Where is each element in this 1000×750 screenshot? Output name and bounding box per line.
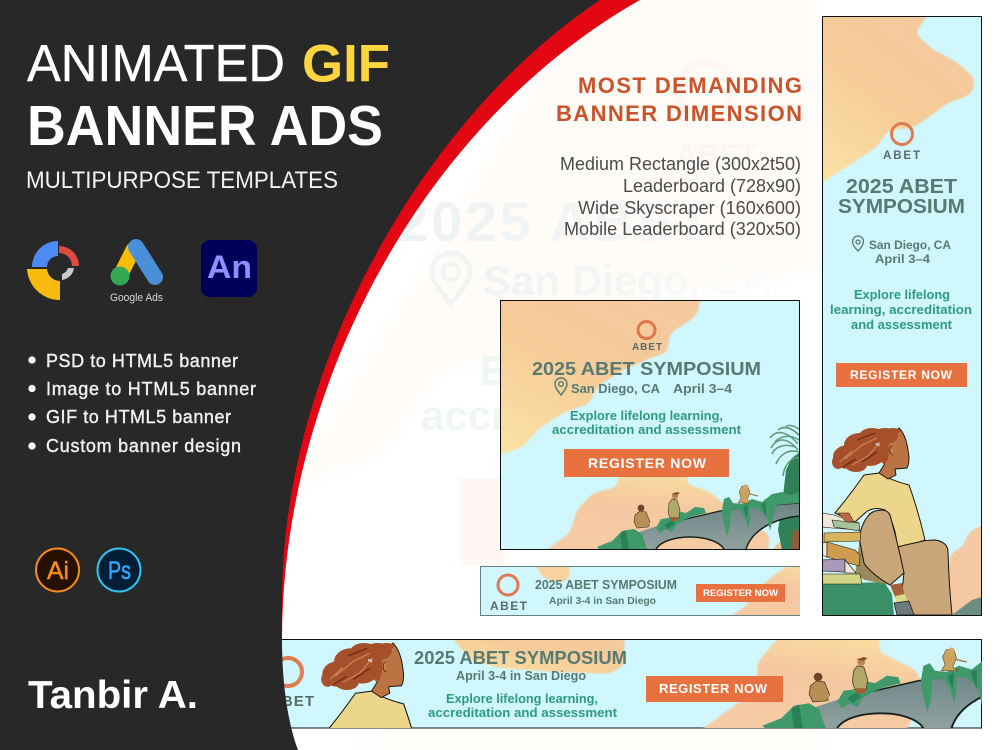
icon: google ads	[110, 247, 163, 304]
faint ghost banner backdrop: accr	[421, 392, 507, 439]
banner tagline: accreditation and assessment	[552, 422, 742, 437]
list: banner services: PSD to HTML5 banner	[46, 351, 238, 371]
icon: google ads: Google Ads	[110, 292, 163, 304]
author name: Tanbir A.	[28, 674, 198, 717]
heading: most demanding banner dimension	[556, 73, 802, 126]
banner tagline: Explore lifelong	[854, 288, 950, 302]
location and date: San Diego, CA	[869, 238, 951, 252]
banner tagline	[428, 691, 618, 720]
button: register now: REGISTER NOW	[588, 455, 707, 471]
date and place: April 3-4 in San Diego	[549, 595, 656, 607]
list: banner services: Custom banner design	[46, 436, 241, 456]
heading: most demanding banner dimension: MOST DEMANDING	[578, 73, 802, 98]
location and date	[571, 381, 733, 396]
banner tagline: accreditation and assessment	[428, 705, 618, 720]
button: register now: REGISTER NOW	[703, 588, 778, 599]
location and date: San Diego, CA	[571, 381, 661, 396]
icon: map pin	[852, 236, 864, 251]
list: banner services	[28, 351, 256, 456]
icon: adobe animate: An	[207, 249, 252, 285]
text block: banner dimension list	[560, 154, 801, 239]
logo: ABET	[490, 575, 528, 613]
text block: banner dimension list: Medium Rectangle (300x2t50)	[560, 154, 801, 174]
icon: book stack	[822, 513, 862, 584]
icon: adobe photoshop	[98, 548, 140, 592]
button: register now	[646, 676, 783, 702]
text block: banner dimension list: Leaderboard (728x90)	[623, 176, 801, 196]
panel: dark sidebar	[0, 0, 600, 750]
text block: banner dimension list: Wide Skyscraper (160x600)	[578, 198, 801, 218]
panel: mobile leaderboard banner	[480, 566, 800, 616]
icon: adobe illustrator	[36, 548, 79, 592]
banner title: 2025 ABET SYMPOSIUM	[535, 577, 677, 592]
icon: adobe photoshop: Ps	[108, 557, 131, 585]
title	[26, 34, 390, 194]
banner tagline: learning, accreditation	[830, 303, 972, 317]
faint ghost banner backdrop: San Diego, CA	[483, 257, 772, 304]
logo: ABET	[883, 124, 920, 162]
red curved accent	[270, 0, 640, 640]
panel: medium rectangle banner	[500, 300, 800, 550]
faint ghost banner backdrop: Ex	[480, 347, 532, 394]
banner title: 2025 ABET SYMPOSIUM	[414, 648, 627, 668]
faint ghost banner backdrop: ABET	[676, 139, 758, 172]
banner title	[838, 176, 965, 218]
location and date: April 3–4	[875, 252, 930, 266]
button: register now	[564, 449, 729, 477]
button: register now	[696, 584, 785, 602]
title: GIF	[302, 34, 390, 94]
list: banner services: GIF to HTML5 banner	[46, 407, 231, 427]
button: register now	[836, 363, 967, 387]
panel: wide skyscraper banner	[822, 16, 982, 616]
date and place: April 3-4 in San Diego	[456, 669, 586, 683]
title: MULTIPURPOSE TEMPLATES	[26, 167, 338, 194]
logo text: ABET: ABET	[270, 693, 314, 710]
icon: adobe illustrator: Ai	[47, 557, 69, 585]
title: BANNER ADS	[27, 94, 383, 158]
logo: ABET: ABET	[883, 150, 920, 162]
list: banner services: Image to HTML5 banner	[46, 379, 256, 399]
banner tagline: Explore lifelong learning,	[570, 408, 723, 423]
logo: ABET: ABET	[632, 342, 662, 353]
location and date: April 3–4	[673, 381, 733, 396]
logo: ABET	[632, 322, 662, 353]
logo: ABET: ABET	[490, 599, 528, 613]
button: register now: REGISTER NOW	[659, 681, 768, 696]
location and date	[869, 238, 951, 266]
banner title: 2025 ABET SYMPOSIUM	[532, 359, 761, 379]
banner tagline: and assessment	[851, 318, 953, 332]
title: ANIMATED	[27, 35, 285, 93]
banner tagline	[830, 288, 972, 332]
banner title: 2025 ABET	[846, 176, 957, 198]
text block: banner dimension list: Mobile Leaderboard (320x50)	[564, 219, 801, 239]
icon: map pin	[555, 378, 567, 395]
banner title: SYMPOSIUM	[838, 196, 965, 218]
heading: most demanding banner dimension: BANNER DIMENSION	[556, 101, 802, 126]
banner tagline: Explore lifelong learning,	[446, 691, 598, 706]
button: register now: REGISTER NOW	[850, 368, 953, 382]
banner tagline	[552, 408, 742, 437]
icon: google web designer	[27, 241, 79, 300]
icon: adobe animate	[201, 240, 257, 297]
panel: leaderboard banner	[282, 639, 982, 728]
faint ghost banner backdrop: 2025 ABET	[397, 190, 714, 253]
faint ghost banner backdrop	[290, 0, 830, 750]
